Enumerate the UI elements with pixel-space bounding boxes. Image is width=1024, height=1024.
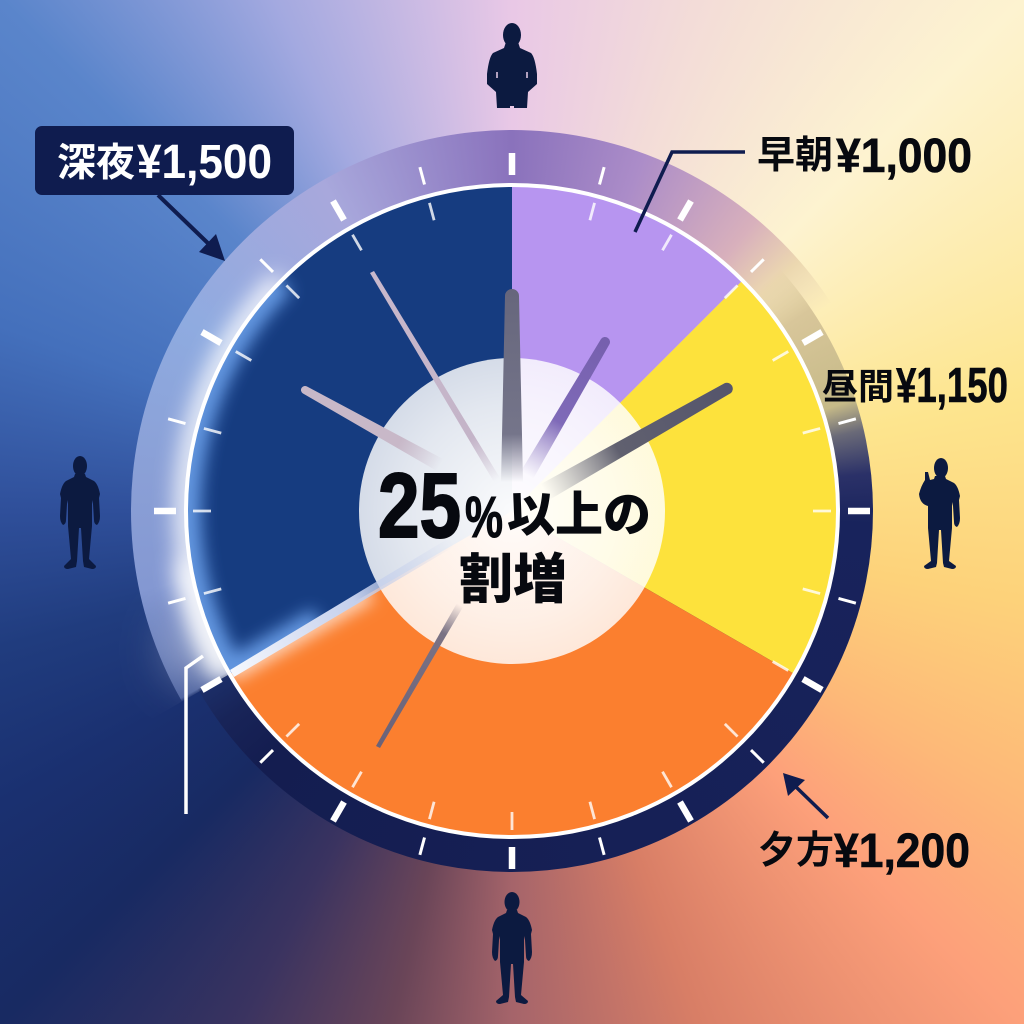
hand: purple (521, 337, 610, 479)
center headline: % (465, 485, 503, 550)
outer tick marks (154, 153, 870, 869)
center headline: 割増 (459, 535, 567, 614)
hand: pale (301, 386, 443, 471)
arrow: late night (158, 195, 225, 261)
label: late night price: 深夜 (57, 132, 135, 188)
hand: dark grey (541, 383, 733, 500)
label: daytime price: 昼間 (822, 358, 894, 410)
label: early morning price (757, 124, 972, 183)
wedge: daytime (512, 280, 838, 674)
hand: thin pale (370, 271, 500, 482)
person: top (487, 23, 537, 108)
hand: thin grey (376, 603, 463, 748)
leader line: white late night (186, 656, 203, 814)
outer white glow around rim (164, 280, 282, 686)
person: bottom (492, 892, 532, 1004)
center headline (378, 455, 651, 614)
label: early morning price: ¥1,000 (836, 130, 972, 183)
person: right, hand raised (919, 458, 960, 569)
hand: light blue (230, 538, 455, 677)
label: evening price (758, 819, 970, 878)
clock hands (230, 271, 733, 748)
hand: top grey (501, 289, 523, 482)
label: early morning price: 早朝 (757, 124, 833, 179)
soft light on evening wedge edge (230, 593, 370, 674)
wedge: late night (186, 185, 512, 674)
clock rim (186, 185, 838, 837)
wedge: early morning (512, 185, 742, 511)
inner tick marks (193, 203, 831, 830)
pie wedges: time bands (186, 185, 838, 837)
label: late night price (35, 126, 294, 195)
inner blue glow in night wedge (186, 280, 320, 674)
light halo ring (131, 130, 893, 892)
label: daytime price (822, 358, 1008, 413)
wedge: evening (230, 511, 794, 837)
leader line: early morning (635, 152, 745, 232)
center headline: 以上の (507, 475, 651, 545)
person: left (60, 456, 100, 569)
center hub disc (359, 358, 665, 664)
label: evening price: 夕方 (758, 819, 834, 874)
label: evening price: ¥1,200 (834, 825, 970, 878)
clock outer ring (151, 150, 873, 872)
arrow: evening (783, 773, 828, 818)
center headline: 25 (378, 455, 461, 557)
label: late night price: ¥1,500 (137, 136, 272, 189)
